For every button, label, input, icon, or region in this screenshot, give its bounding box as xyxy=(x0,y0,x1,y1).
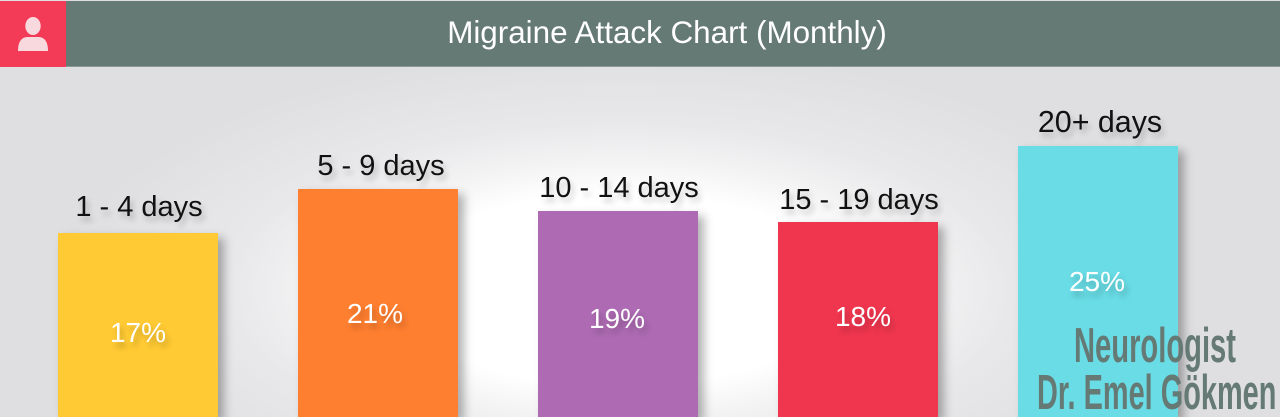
label: 5-9 days: 5 - 9 days xyxy=(317,150,445,182)
icon: person xyxy=(0,1,66,67)
label: 1-4 days: 1 - 4 days xyxy=(75,191,203,223)
title: Migraine Attack Chart (Monthly) xyxy=(447,15,887,50)
value: 17%: 17% xyxy=(110,317,166,348)
bar: 20+ days xyxy=(1018,146,1178,417)
bar: 15-19 days xyxy=(778,222,938,417)
header bar xyxy=(0,1,1280,67)
label: 15-19 days: 15 - 19 days xyxy=(779,184,939,216)
bar: 5-9 days xyxy=(298,189,458,417)
value: 19%: 19% xyxy=(589,303,645,334)
label: 20+ days: 20+ days xyxy=(1038,105,1162,139)
value: 25%: 25% xyxy=(1069,266,1125,297)
watermark: neurologist name xyxy=(1037,321,1276,417)
bar: 1-4 days xyxy=(58,233,218,417)
bar: 10-14 days xyxy=(538,211,698,417)
value: 21%: 21% xyxy=(347,298,403,329)
value: 18%: 18% xyxy=(835,301,891,332)
label: 10-14 days: 10 - 14 days xyxy=(539,172,699,204)
